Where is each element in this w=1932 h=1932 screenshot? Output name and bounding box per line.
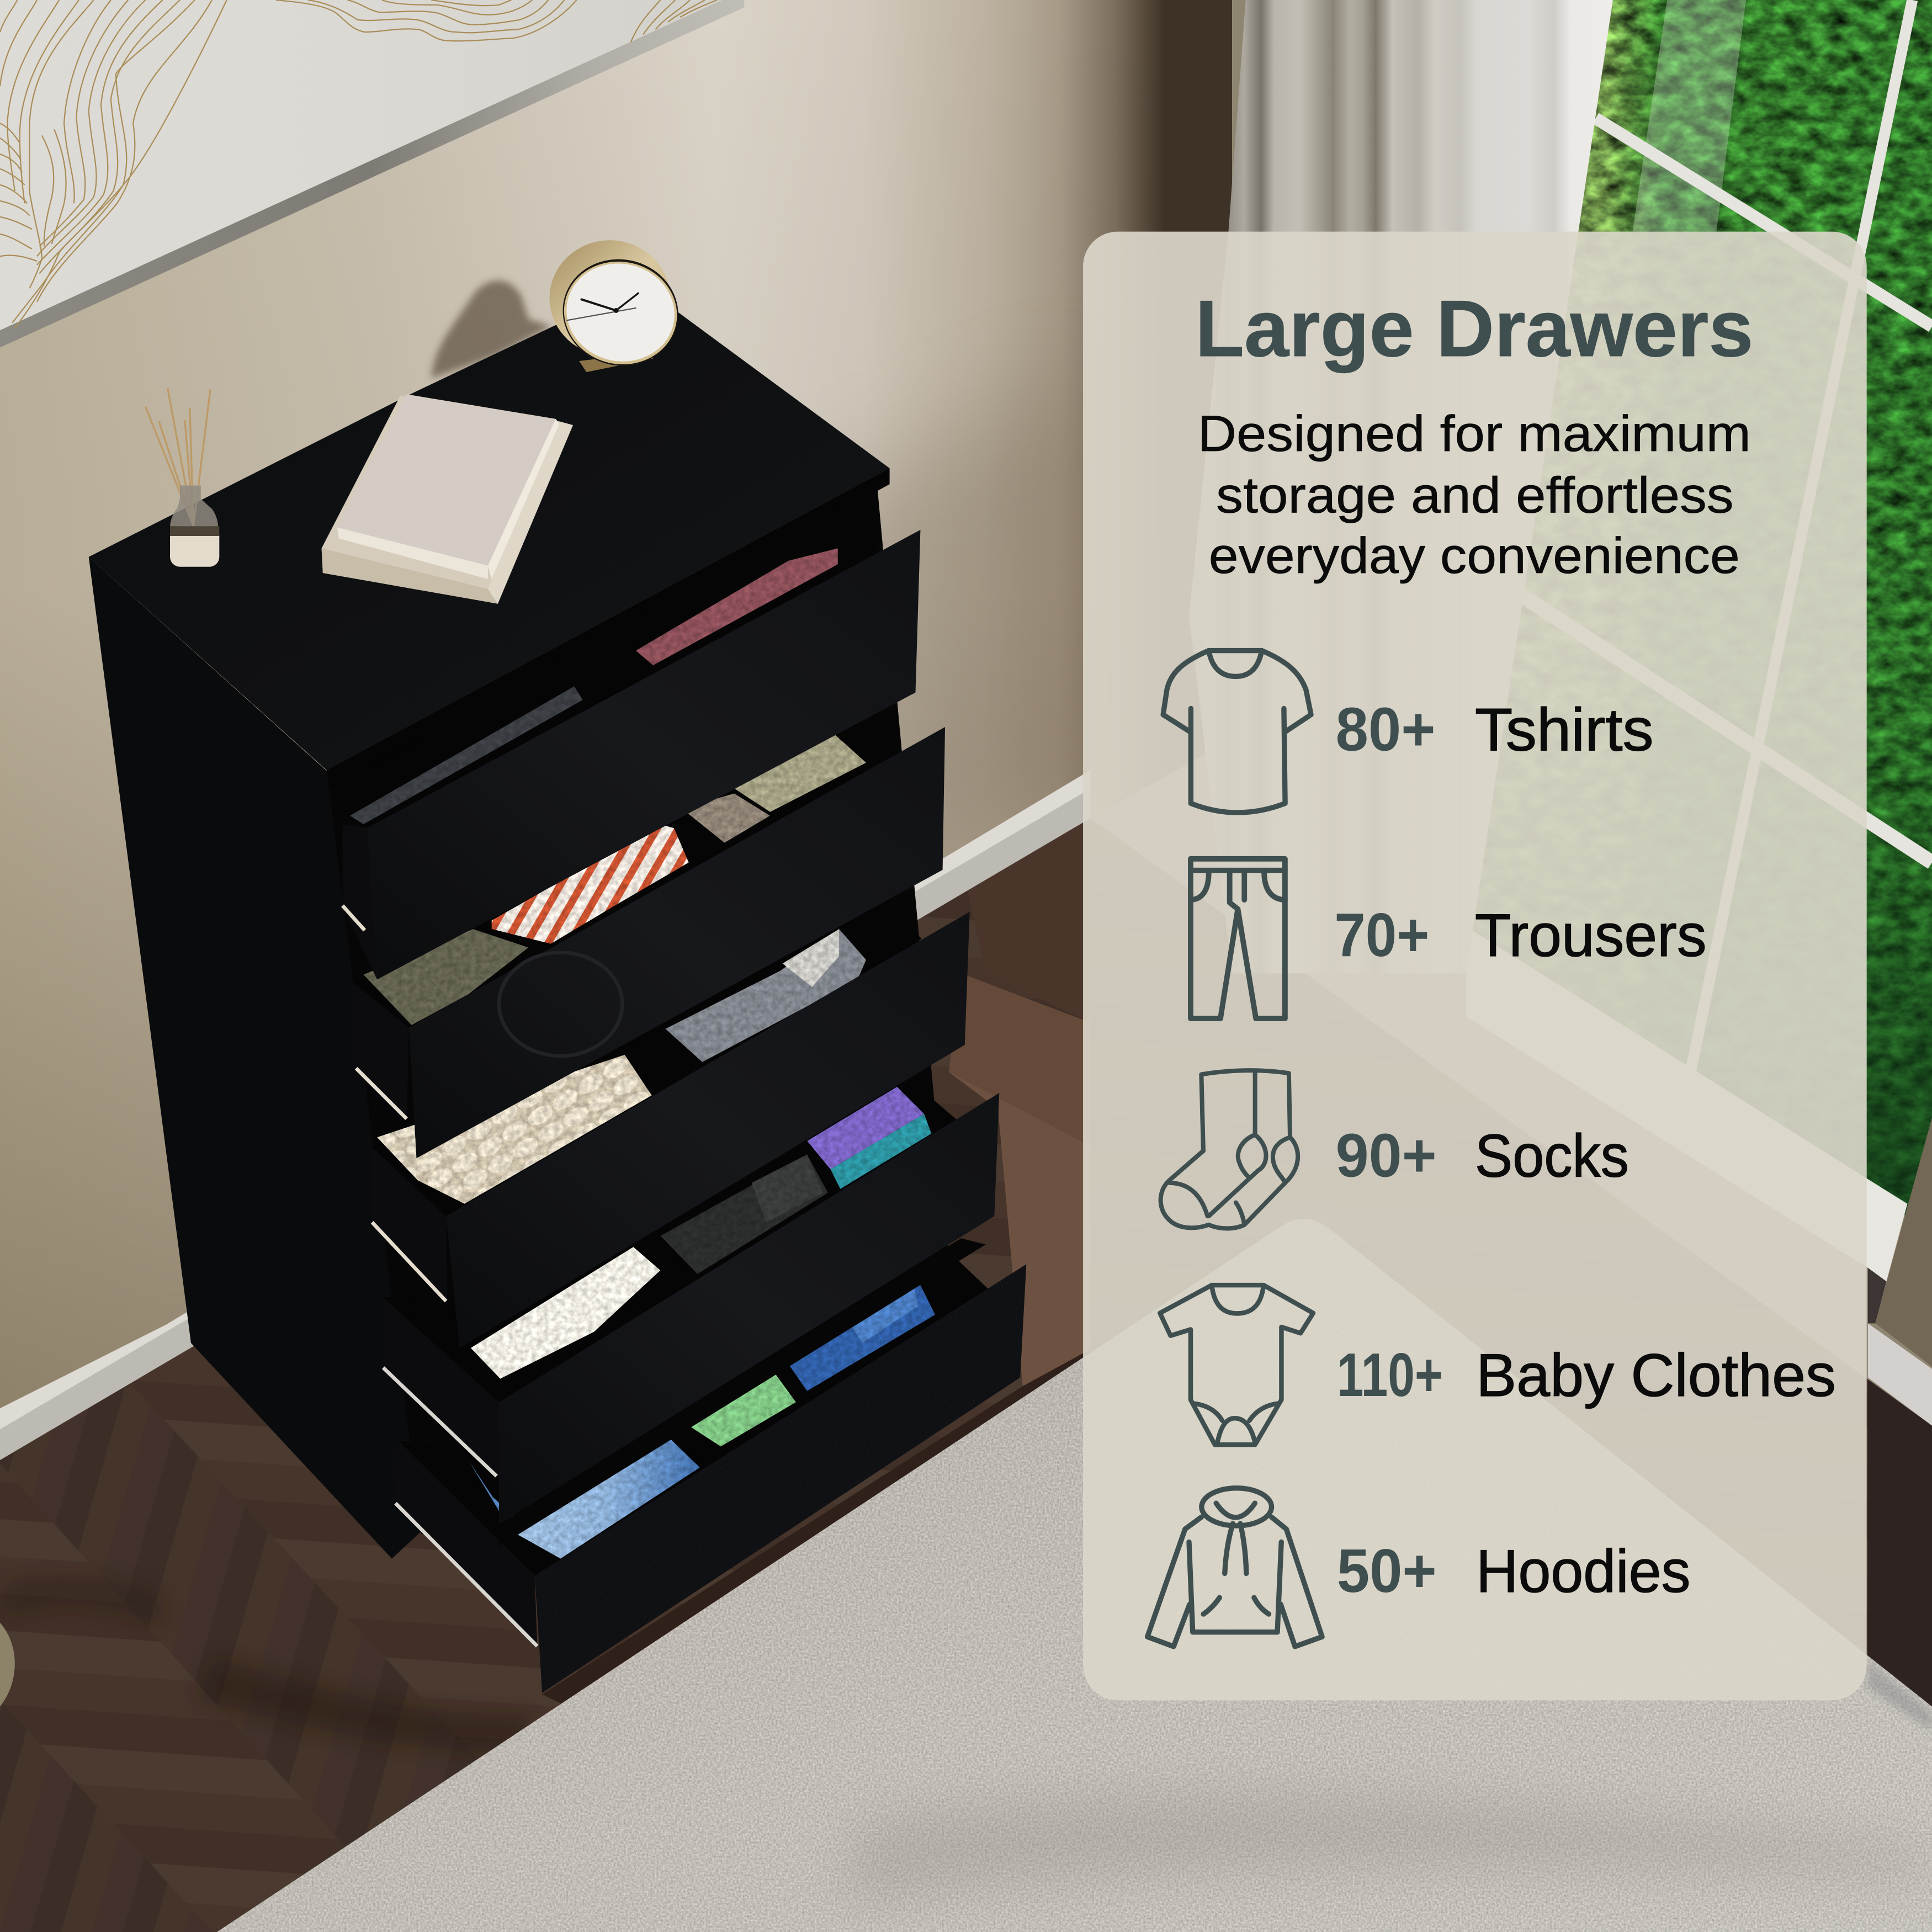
label: Baby Clothes [1476, 1342, 1836, 1409]
chest of drawers [89, 285, 1026, 1693]
item: baby clothes [1160, 1285, 1836, 1445]
left baseboard [0, 770, 1090, 1460]
text block: description [1198, 406, 1751, 584]
label: Tshirts [1475, 696, 1654, 763]
count: 80+ [1336, 694, 1435, 763]
drawer 1 [343, 527, 920, 980]
drawer 3 [372, 899, 970, 1348]
item: t-shirts [1163, 651, 1654, 813]
drawer 4 [383, 1078, 999, 1546]
right wall with window [1090, 0, 1932, 1426]
item: socks [1161, 1070, 1629, 1228]
count: 90+ [1336, 1121, 1437, 1190]
floor lamp edge [0, 1623, 15, 1707]
garden view through window [1466, 0, 1932, 1232]
stack of books [322, 394, 573, 604]
icon: baby bodysuit [1160, 1285, 1313, 1445]
icon: socks [1161, 1070, 1298, 1228]
label: Hoodies [1476, 1538, 1690, 1605]
wall art print [0, 0, 744, 347]
label: Socks [1475, 1123, 1629, 1190]
label: Trousers [1475, 902, 1707, 969]
panel: large drawers [1083, 232, 1867, 1700]
text block: description: Designed for maximum [1198, 406, 1751, 462]
text block: description: storage and effortless [1216, 468, 1734, 524]
floor: wooden herringbone [0, 789, 1932, 1932]
rug [217, 1219, 1932, 1932]
chest top [89, 285, 890, 770]
right baseboard [1868, 1323, 1932, 1426]
desk clock [550, 240, 688, 376]
item: hoodies [1148, 1488, 1690, 1647]
drawer 5 [396, 1247, 1026, 1693]
count: 110+ [1337, 1340, 1443, 1409]
clock shadow on wall [431, 280, 552, 378]
window sill [1466, 927, 1907, 1281]
window frame bars [1516, 0, 1932, 1072]
icon: trousers [1191, 859, 1285, 1018]
wall background [0, 0, 1232, 1479]
drawer 2 [351, 716, 945, 1158]
icon: t-shirt [1163, 651, 1311, 813]
count: 70+ [1334, 900, 1429, 969]
count: 50+ [1337, 1536, 1437, 1605]
tall object leaning by the window [1875, 1118, 1932, 1366]
lower book [322, 396, 573, 604]
heading: Large Drawers [1195, 284, 1753, 373]
upper book [337, 394, 556, 566]
chest body front [327, 468, 949, 1540]
reed diffuser [145, 388, 219, 567]
chest side [89, 557, 425, 1559]
icon: hoodie [1148, 1488, 1322, 1647]
text block: description: everyday convenience [1209, 528, 1740, 584]
curtain [1189, 0, 1613, 973]
item: trousers [1191, 859, 1707, 1018]
